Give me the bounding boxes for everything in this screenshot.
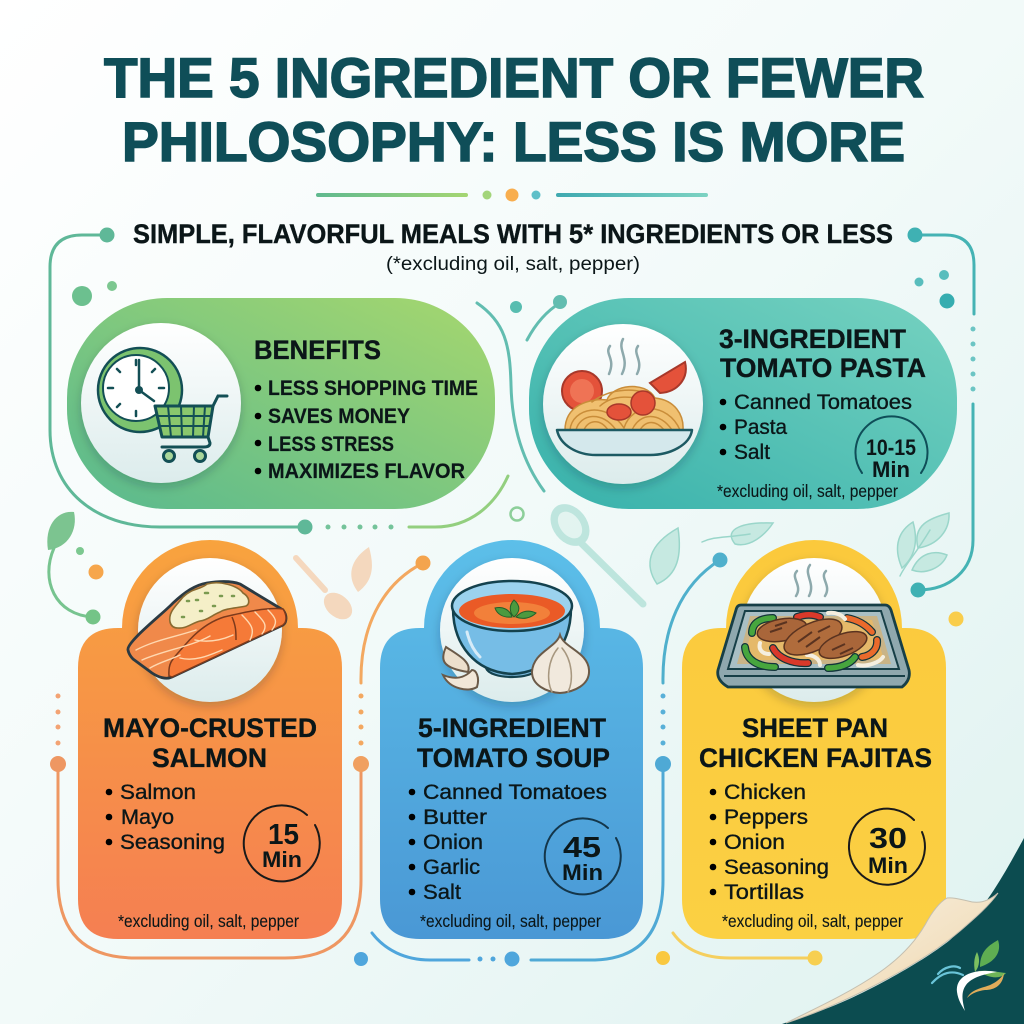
decoration: teal leaves [650,513,949,584]
time badge: Min [868,853,908,878]
subtitle [133,219,893,275]
footnote: *excluding oil, salt, pepper [717,481,898,501]
ingredient list: Chicken [724,781,806,804]
ingredient list: Salmon [120,781,196,804]
heading [103,713,317,773]
connector: yellow frame [656,612,964,966]
ingredient list: Garlic [423,856,480,879]
heading: 5-INGREDIENT [418,713,606,743]
ingredient list [720,391,912,464]
heading [719,324,926,383]
ingredient list: Seasoning [724,856,829,879]
panel: salmon [78,540,342,939]
time badge [856,416,928,482]
time badge: Min [872,457,910,482]
benefits list [255,377,478,483]
ingredient list: Onion [423,831,483,854]
footnote: *excluding oil, salt, pepper [118,911,299,931]
connector: orange frame [50,556,430,958]
heading [699,713,932,773]
panel: benefits [67,298,495,509]
time badge: 15 [268,819,299,851]
title divider [316,188,708,202]
heading: 3-INGREDIENT [719,324,906,354]
connector: centre curves [477,295,567,520]
benefits list: LESS STRESS [268,433,394,456]
time badge: Min [262,847,302,872]
benefits list: MAXIMIZES FLAVOR [268,460,465,483]
page curl corner [782,838,1024,1024]
title: THE 5 INGREDIENT OR FEWER [104,46,924,109]
panel: chicken fajitas [682,540,946,939]
decoration: orange spoon and leaf [296,547,372,625]
title: PHILOSOPHY: LESS IS MORE [122,110,905,173]
ingredient list: Mayo [121,806,174,829]
decoration: green leaf and stem [47,512,104,624]
time badge: 30 [869,823,907,855]
heading [417,713,610,773]
ingredient list: Peppers [724,806,808,829]
icon circle: clock and cart [81,323,241,483]
connector: right frame [908,228,976,598]
subtitle: (*excluding oil, salt, pepper) [386,253,640,275]
title [104,46,924,173]
ingredient list [106,781,225,854]
time badge: 45 [563,832,601,864]
ingredient list: Onion [724,831,785,854]
ingredient list: Pasta [734,416,787,439]
icon circle: sheet pan [718,558,909,702]
ingredient list: Canned Tomatoes [734,391,912,414]
panel: tomato soup [380,540,643,939]
panel: tomato pasta [529,298,957,509]
ingredient list [710,781,829,904]
subtitle: SIMPLE, FLAVORFUL MEALS WITH 5* INGREDIENTS OR LESS [133,219,893,249]
connector: left frame [50,228,508,534]
heading: SHEET PAN [742,713,888,743]
time badge: 10-15 [866,435,916,460]
time badge [244,805,320,881]
logo [932,940,1006,1011]
heading: TOMATO SOUP [417,743,610,773]
heading: BENEFITS [254,335,381,365]
heading: CHICKEN FAJITAS [699,743,932,773]
ingredient list: Butter [423,806,487,829]
icon circle: soup and garlic [440,558,589,702]
footnote: *excluding oil, salt, pepper [722,911,903,931]
icon circle: pasta bowl [543,324,703,484]
decoration: teal spoon [542,496,643,604]
footnote: *excluding oil, salt, pepper [420,911,601,931]
time badge: Min [562,860,603,885]
heading: MAYO-CRUSTED [103,713,317,743]
heading: TOMATO PASTA [720,353,926,383]
ingredient list: Canned Tomatoes [423,781,607,804]
icon circle: salmon [128,558,286,702]
ingredient list: Salt [423,881,461,904]
benefits list: SAVES MONEY [268,405,410,428]
heading: SALMON [152,743,267,773]
ingredient list: Salt [734,441,770,464]
ingredient list: Tortillas [724,881,804,904]
ingredient list [409,781,607,904]
benefits list: LESS SHOPPING TIME [268,377,478,400]
connector: blue frame [354,552,728,966]
time badge [849,809,925,885]
time badge [545,818,621,894]
ingredient list: Seasoning [120,831,225,854]
